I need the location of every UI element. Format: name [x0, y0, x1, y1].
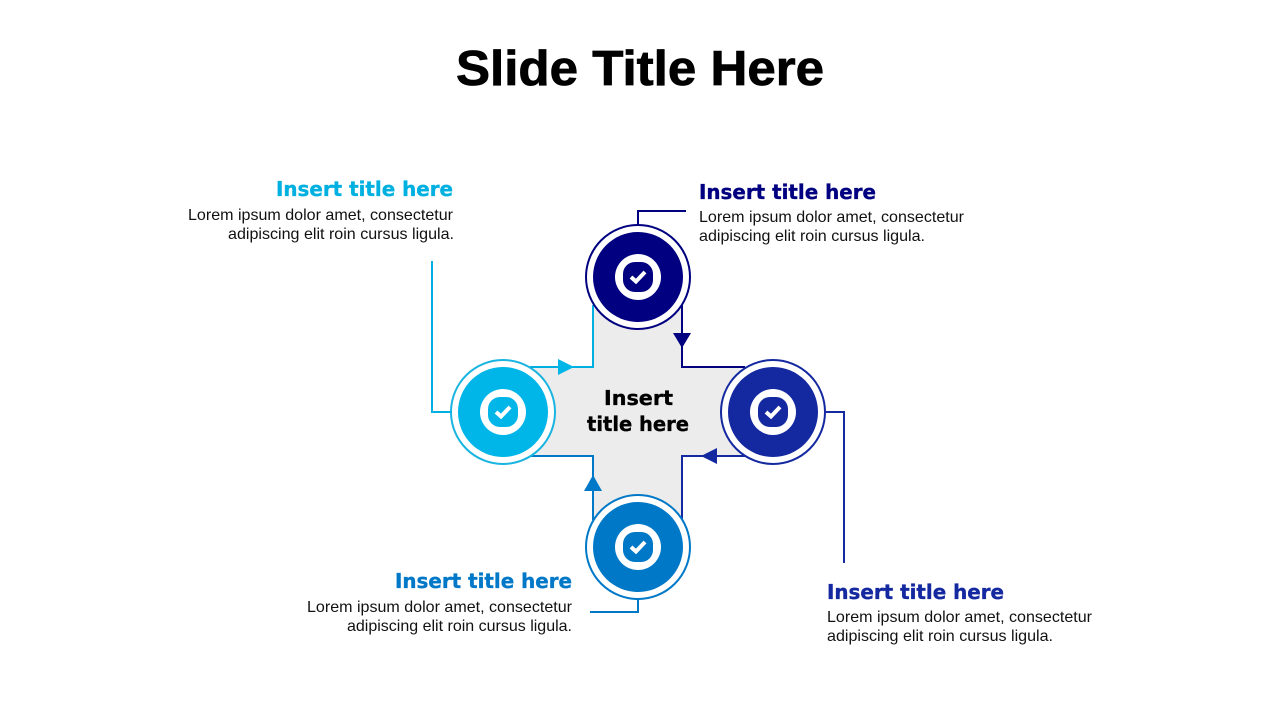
icon node: cyan	[451, 360, 555, 464]
connector arrow: mid blue	[530, 456, 602, 520]
text block: navy: adipiscing elit roin cursus ligula.	[699, 228, 925, 245]
icon node: navy	[586, 225, 690, 329]
icon node: royal blue	[721, 360, 825, 464]
center label	[587, 386, 689, 436]
text block: cyan: Lorem ipsum dolor amet, consectetur	[188, 207, 454, 224]
text block: mid blue	[307, 569, 573, 635]
icon node: mid blue	[586, 495, 690, 599]
text block: royal blue: adipiscing elit roin cursus ligula.	[827, 628, 1053, 645]
text block: royal blue: Insert title here	[827, 580, 1004, 604]
callout line: mid blue	[590, 600, 638, 612]
text block: navy: Lorem ipsum dolor amet, consectetur	[699, 209, 965, 226]
text block: mid blue: Insert title here	[395, 569, 572, 593]
center label: title here	[587, 412, 689, 436]
connector arrow: navy	[673, 305, 745, 367]
connector arrow: royal blue	[682, 448, 745, 520]
text block: navy: Insert title here	[699, 180, 876, 204]
text block: cyan: Insert title here	[276, 177, 453, 201]
text block: cyan	[188, 177, 454, 243]
text block: mid blue: Lorem ipsum dolor amet, consectetur	[307, 599, 573, 616]
text block: cyan: adipiscing elit roin cursus ligula.	[228, 226, 454, 243]
central cross shape	[503, 277, 773, 547]
text block: mid blue: adipiscing elit roin cursus ligula.	[347, 618, 572, 635]
text block: royal blue: Lorem ipsum dolor amet, consectetur	[827, 609, 1093, 626]
text block: navy	[699, 180, 965, 245]
center label: Insert	[604, 386, 673, 410]
title: Slide Title Here	[456, 42, 824, 96]
connector arrow: cyan	[530, 305, 593, 375]
callout line: cyan	[432, 261, 451, 412]
text block: royal blue	[827, 580, 1093, 645]
callout line: royal blue	[826, 412, 844, 563]
callout line: navy	[638, 211, 686, 225]
